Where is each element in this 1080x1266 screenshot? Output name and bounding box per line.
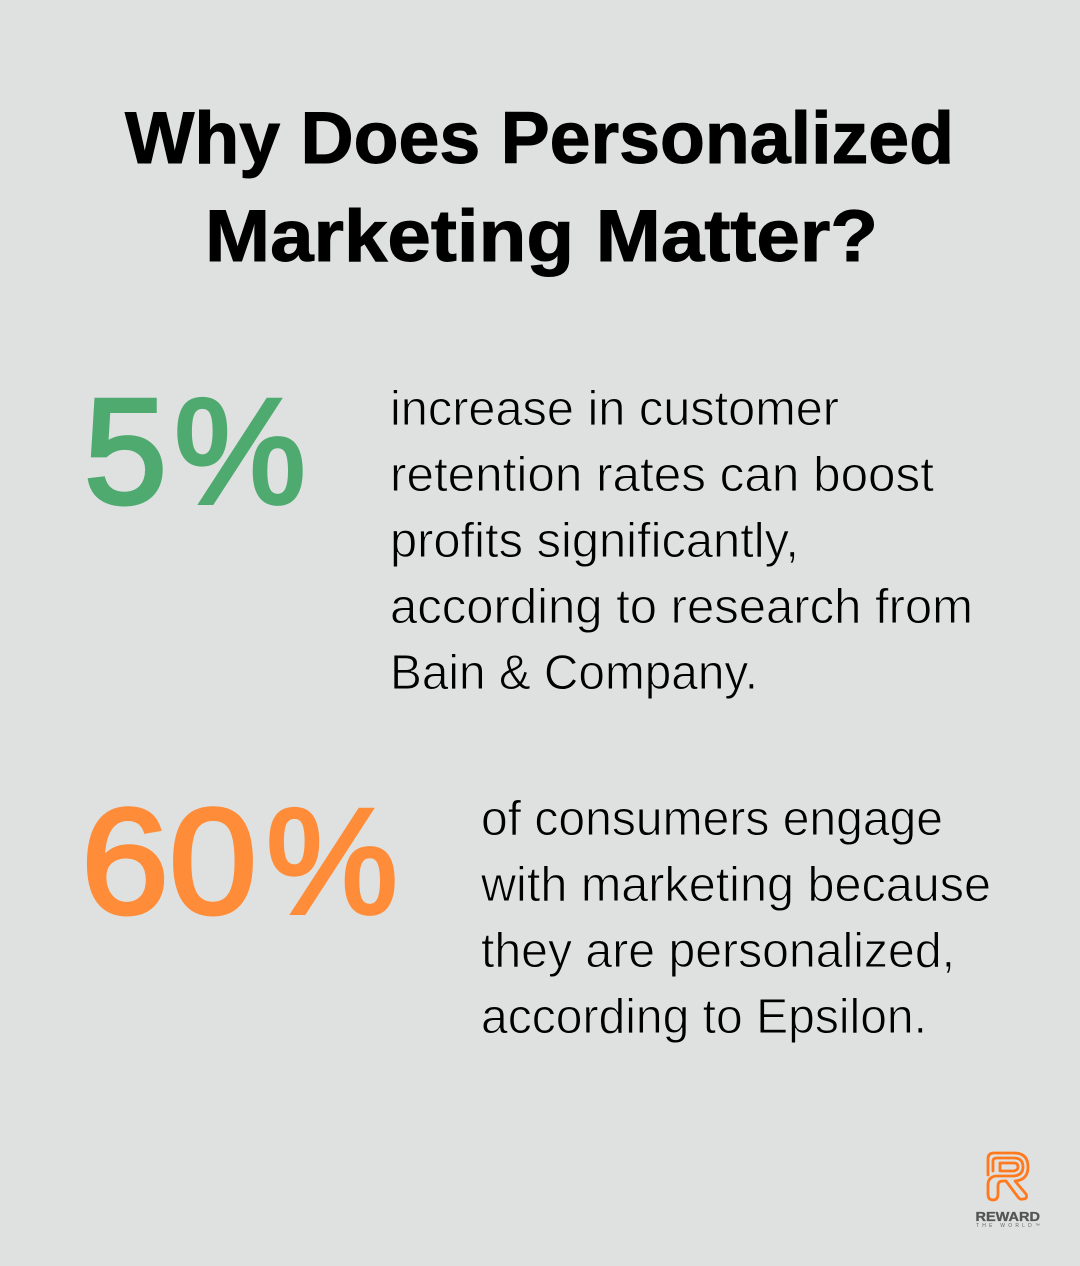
stat: 5%: % [174, 367, 306, 535]
text block: customer retention: increase in customer [390, 382, 839, 436]
title: Why Does Personalized [125, 98, 954, 179]
title: Marketing Matter? [205, 196, 878, 277]
text block: customer retention: profits significantly, [390, 514, 799, 568]
stat: 60%: 60 [81, 777, 257, 945]
stat: 60%: % [266, 777, 398, 945]
icon: R mark [988, 1153, 1028, 1200]
logo: Reward the World [976, 1153, 1040, 1229]
logo tagline: THE WORLD™ [976, 1223, 1040, 1229]
text block: consumer engagement: they are personalized, [481, 924, 955, 978]
text block: consumer engagement: according to Epsilon. [481, 990, 927, 1044]
text block: consumer engagement [480, 792, 991, 1044]
text block: customer retention: according to research from [390, 580, 973, 634]
text block: consumer engagement: with marketing because [480, 858, 991, 912]
title [125, 98, 954, 277]
text block: customer retention [390, 382, 973, 700]
stat: 5% [84, 367, 306, 535]
stat: 5%: 5 [84, 367, 167, 535]
text block: customer retention: Bain & Company. [390, 646, 758, 700]
logo wordmark: REWARD [976, 1209, 1040, 1224]
text block: consumer engagement: of consumers engage [481, 792, 943, 846]
text block: customer retention: retention rates can boost [390, 448, 934, 502]
stat: 60% [81, 777, 398, 945]
